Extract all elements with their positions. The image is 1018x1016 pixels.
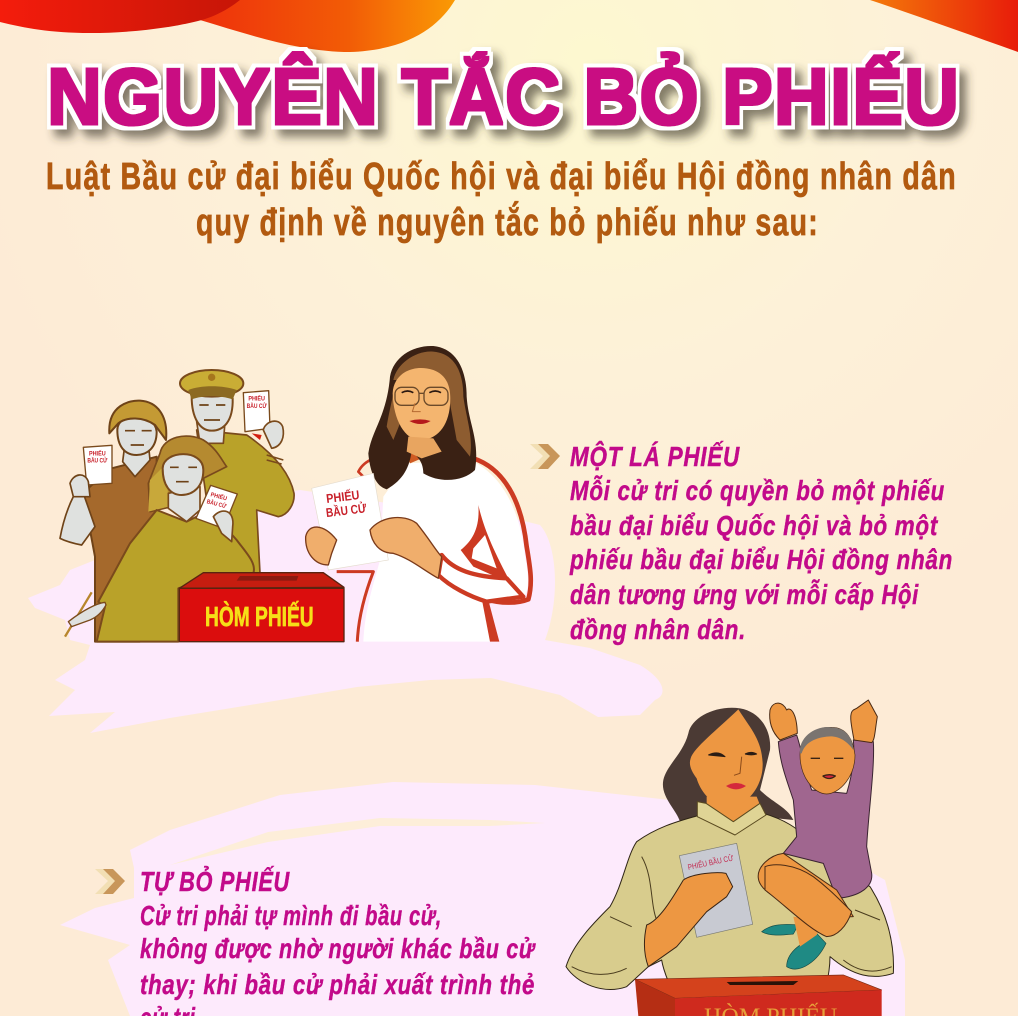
mother face: [690, 709, 763, 807]
brush gap streak: [170, 818, 545, 865]
text block: một lá phiếu: đồng nhân dân.: [570, 614, 746, 645]
woman in white ao dai: [306, 346, 531, 642]
text block: tự bỏ phiếu: Cử tri phải tự mình đi bầu cử,: [140, 900, 442, 931]
soldier in sailor uniform: [180, 370, 294, 573]
ballot box: [635, 975, 882, 1016]
soldier in sailor uniform: PHIẾU: [248, 396, 265, 403]
mother collar: [697, 802, 766, 835]
subtitle: [46, 156, 957, 244]
text block: tự bỏ phiếu: [140, 865, 536, 1016]
mother sleeve folds: [572, 857, 892, 974]
text block: tự bỏ phiếu: thay; khi bầu cử phải xuất trình thẻ: [140, 969, 535, 1000]
text block: một lá phiếu: bầu đại biểu Quốc hội và bỏ một: [570, 510, 939, 541]
mother neck: [707, 797, 760, 827]
text block: một lá phiếu: dân tương ứng với mỗi cấp Hội: [570, 579, 919, 610]
illustration: voters and ballot box: [60, 346, 531, 642]
text block: tự bỏ phiếu: không được nhờ người khác bầu cử: [140, 933, 536, 964]
woman with scarf: PHIẾU: [210, 491, 228, 502]
woman in white ao dai: BẦU CỬ: [325, 500, 368, 520]
decorative top-left ribbon: [0, 0, 455, 52]
ballot box: HÒM PHIẾU: [205, 601, 314, 632]
brush stroke backgrounds: [28, 490, 905, 1016]
arrow icon: section one: [530, 444, 560, 469]
ballot in mother's hand: [679, 843, 753, 937]
arrow icon: section two: [95, 869, 125, 894]
soldier with helmet: BẦU CỬ: [87, 458, 107, 465]
illustration: mother with child: [566, 700, 894, 1016]
ballot in mother's hand: PHIẾU BẦU CỬ: [687, 852, 735, 872]
mother body: [566, 813, 894, 989]
text block: tự bỏ phiếu: TỰ BỎ PHIẾU: [140, 865, 290, 897]
baby: [758, 700, 877, 969]
soldier with helmet: [60, 401, 166, 642]
woman in white ao dai: PHIẾU: [325, 487, 360, 506]
title: NGUYÊN TẮC BỎ PHIẾU: [47, 51, 959, 141]
decorative top-right ribbon: [870, 0, 1018, 52]
woman with scarf: BẦU CỬ: [206, 498, 227, 510]
woman with scarf: [65, 436, 254, 642]
text block: một lá phiếu: MỘT LÁ PHIẾU: [570, 440, 740, 472]
soldier in sailor uniform: BẦU CỬ: [247, 403, 267, 410]
text block: một lá phiếu: [569, 440, 953, 645]
mother hair: [663, 708, 793, 822]
soldier with helmet: PHIẾU: [89, 450, 106, 457]
subtitle: quy định về nguyên tắc bỏ phiếu như sau:: [196, 200, 819, 244]
ballot box: [179, 573, 344, 642]
